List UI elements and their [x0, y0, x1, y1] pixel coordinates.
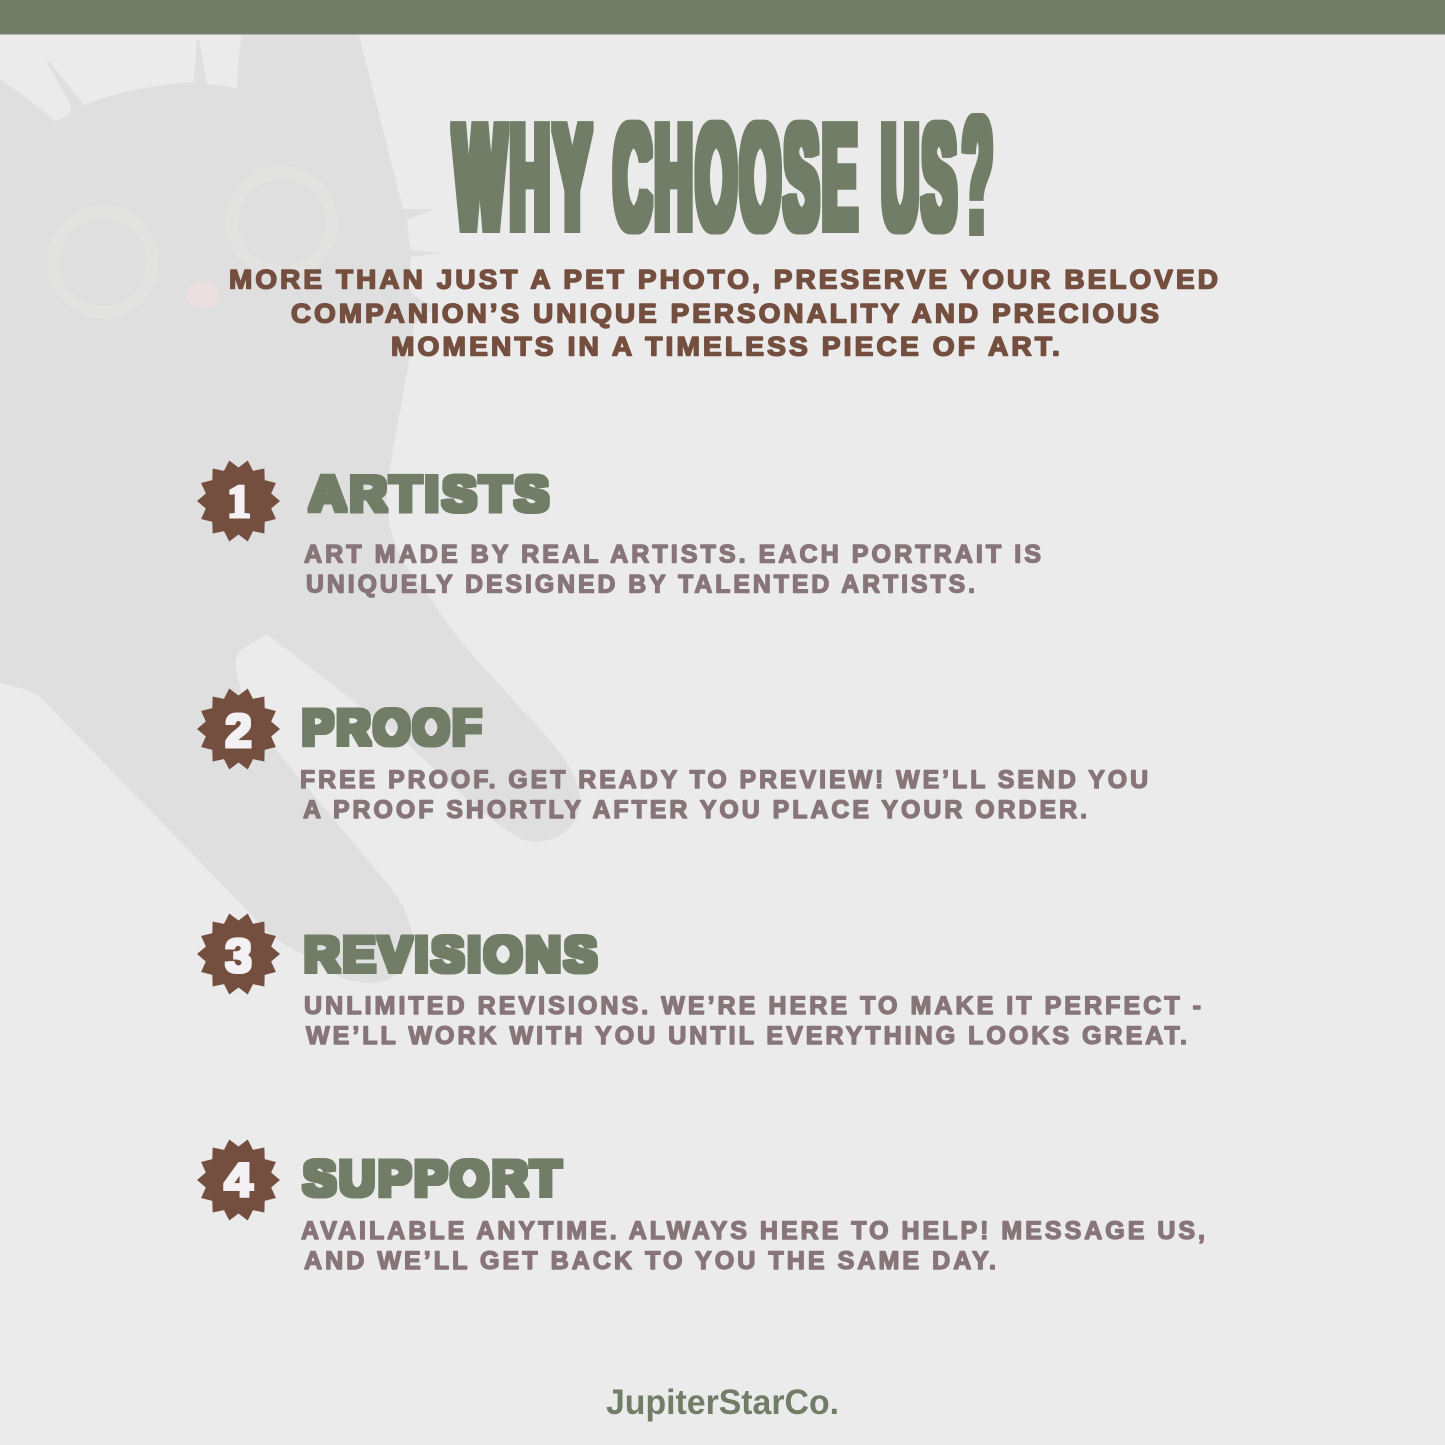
description 2: [300, 766, 1151, 824]
subtitle: COMPANION’S UNIQUE PERSONALITY AND PRECIOUS: [291, 298, 1162, 328]
heading: revisions: REVISIONS: [304, 926, 600, 982]
item 2: proof: [197, 689, 1151, 824]
title: [454, 80, 992, 270]
left eye ring: [53, 212, 153, 312]
badge 3: 3: [225, 929, 252, 982]
top bar: [0, 0, 1445, 34]
description 2: FREE PROOF. GET READY TO PREVIEW! WE’LL SEND YOU: [300, 766, 1151, 794]
description 3: UNLIMITED REVISIONS. WE’RE HERE TO MAKE IT PERFECT -: [304, 992, 1204, 1020]
description 4: [301, 1217, 1208, 1275]
right eye ring: [232, 172, 332, 272]
heading: proof: PROOF: [302, 700, 484, 756]
badge 1: 1: [227, 476, 251, 528]
text: US: [882, 95, 960, 260]
description 4: AVAILABLE ANYTIME. ALWAYS HERE TO HELP! MESSAGE US,: [301, 1217, 1208, 1245]
badge 1: [197, 461, 280, 541]
badge 2: [197, 689, 280, 769]
heading: artists: ARTISTS: [309, 466, 552, 522]
description 2: A PROOF SHORTLY AFTER YOU PLACE YOUR ORDER.: [303, 796, 1090, 824]
silhouette body: [0, 35, 580, 983]
text: ?: [963, 80, 992, 270]
description 1: UNIQUELY DESIGNED BY TALENTED ARTISTS.: [306, 570, 978, 598]
badge 4: 4: [224, 1153, 253, 1206]
badge 2: 2: [225, 704, 252, 757]
description 3: WE’LL WORK WITH YOU UNTIL EVERYTHING LOOKS GREAT.: [306, 1022, 1190, 1050]
description 1: ART MADE BY REAL ARTISTS. EACH PORTRAIT IS: [304, 540, 1044, 568]
item 1: artists: [197, 461, 1044, 598]
title: WHY: [454, 95, 595, 260]
description 3: [304, 992, 1204, 1050]
description 1: [304, 540, 1044, 598]
title: CHOOSE: [614, 95, 861, 260]
item 4: support: [197, 1140, 1208, 1275]
background illustration: pet silhouette: [0, 35, 580, 983]
heading: support: SUPPORT: [303, 1150, 564, 1206]
subtitle: MORE THAN JUST A PET PHOTO, PRESERVE YOUR BELOVED: [229, 264, 1221, 294]
badge 4: [197, 1140, 280, 1220]
nose: [187, 281, 219, 309]
footer brand: JupiterStarCo.: [606, 1383, 839, 1422]
subtitle: MOMENTS IN A TIMELESS PIECE OF ART.: [391, 332, 1063, 362]
subtitle: [229, 264, 1221, 362]
item 3: revisions: [197, 914, 1204, 1050]
description 4: AND WE’LL GET BACK TO YOU THE SAME DAY.: [304, 1247, 999, 1275]
badge 3: [197, 914, 280, 994]
